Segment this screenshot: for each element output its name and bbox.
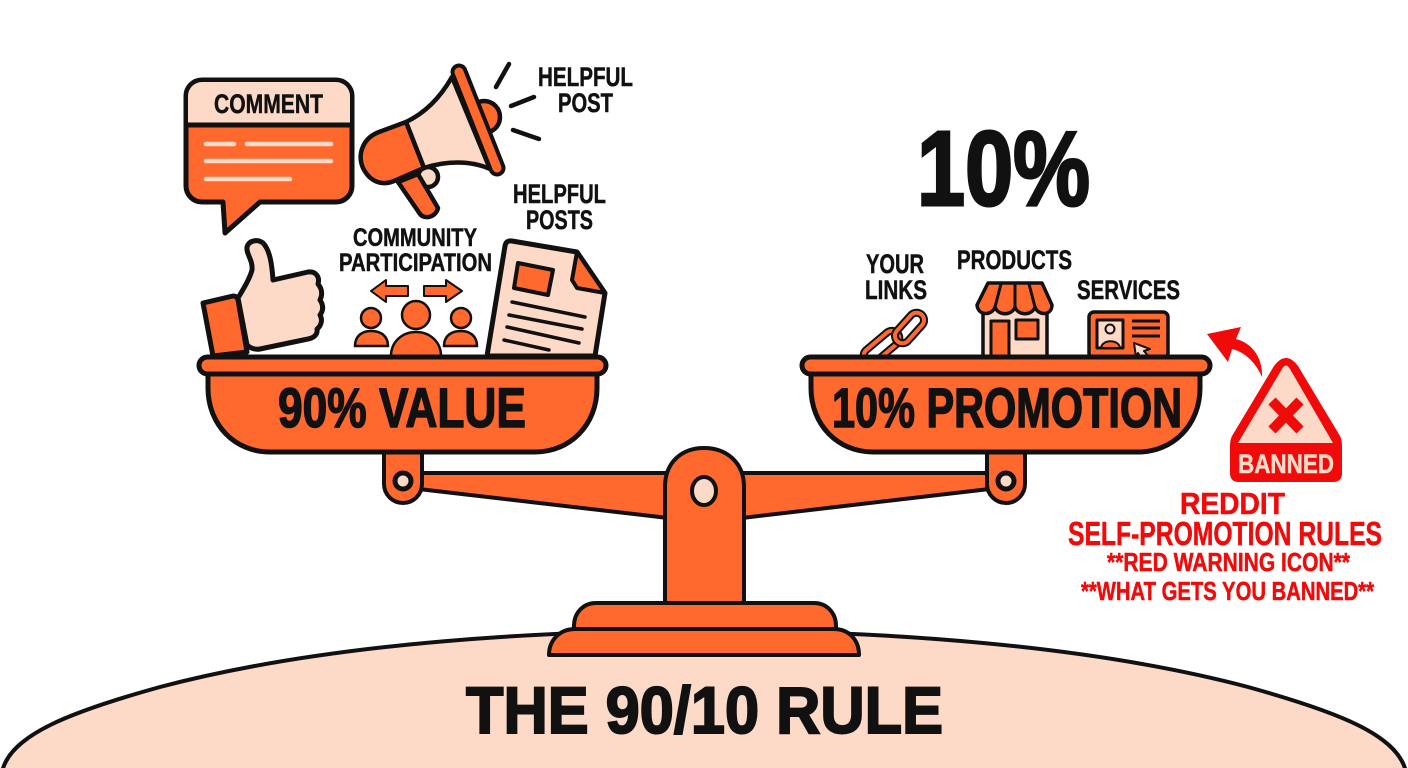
right hanger bbox=[987, 450, 1025, 503]
label: your links: YOUR bbox=[866, 249, 924, 279]
label: 10% promotion: 10% PROMOTION bbox=[832, 376, 1182, 439]
icon: group of people bbox=[355, 301, 477, 356]
label: your links: LINKS bbox=[865, 275, 927, 305]
label: helpful posts bbox=[513, 179, 606, 235]
icon: service card with cursor bbox=[1089, 312, 1168, 358]
icon: chain link bbox=[861, 310, 927, 366]
red warning text block: **RED WARNING ICON** bbox=[1107, 547, 1351, 577]
left pan bbox=[199, 357, 606, 452]
banned label: BANNED bbox=[1238, 449, 1334, 479]
sound lines bbox=[496, 64, 539, 139]
upper base bbox=[574, 603, 836, 630]
label: helpful posts: POSTS bbox=[526, 205, 593, 235]
title: THE 90/10 RULE bbox=[466, 673, 943, 747]
label: community participation bbox=[339, 224, 492, 277]
red warning text block: REDDIT bbox=[1180, 486, 1285, 521]
label: your links bbox=[865, 249, 927, 305]
label: products: PRODUCTS bbox=[957, 245, 1072, 275]
label: helpful posts: HELPFUL bbox=[513, 179, 606, 209]
icon: storefront bbox=[977, 283, 1052, 358]
comment label: COMMENT bbox=[214, 89, 323, 119]
icon: comment speech bubble bbox=[186, 80, 352, 233]
icon: megaphone bbox=[361, 64, 539, 217]
red warning text block bbox=[1068, 486, 1382, 606]
label: 90% value: 90% VALUE bbox=[278, 376, 526, 439]
scale: beam, post and base bbox=[384, 448, 1025, 655]
lower base bbox=[549, 629, 859, 655]
label: helpful post: HELPFUL bbox=[538, 62, 633, 92]
arrow: warning to promotion pan bbox=[1207, 327, 1262, 377]
icon: thumbs up bbox=[203, 241, 323, 356]
label: services: SERVICES bbox=[1077, 275, 1180, 305]
icon: banned warning triangle bbox=[1230, 358, 1342, 482]
label: community participation: COMMUNITY bbox=[353, 224, 477, 252]
ground mound bbox=[2, 630, 1406, 768]
label: helpful post: POST bbox=[558, 88, 613, 118]
icon: community arrows bbox=[371, 280, 462, 302]
label: community participation: PARTICIPATION bbox=[339, 249, 492, 277]
beam bbox=[410, 473, 998, 518]
right pan bbox=[802, 357, 1210, 452]
left hanger bbox=[384, 450, 422, 503]
icon: document bbox=[487, 241, 605, 356]
label: helpful post bbox=[538, 62, 633, 118]
big 10% heading: 10% bbox=[917, 110, 1090, 228]
central post bbox=[665, 448, 744, 605]
